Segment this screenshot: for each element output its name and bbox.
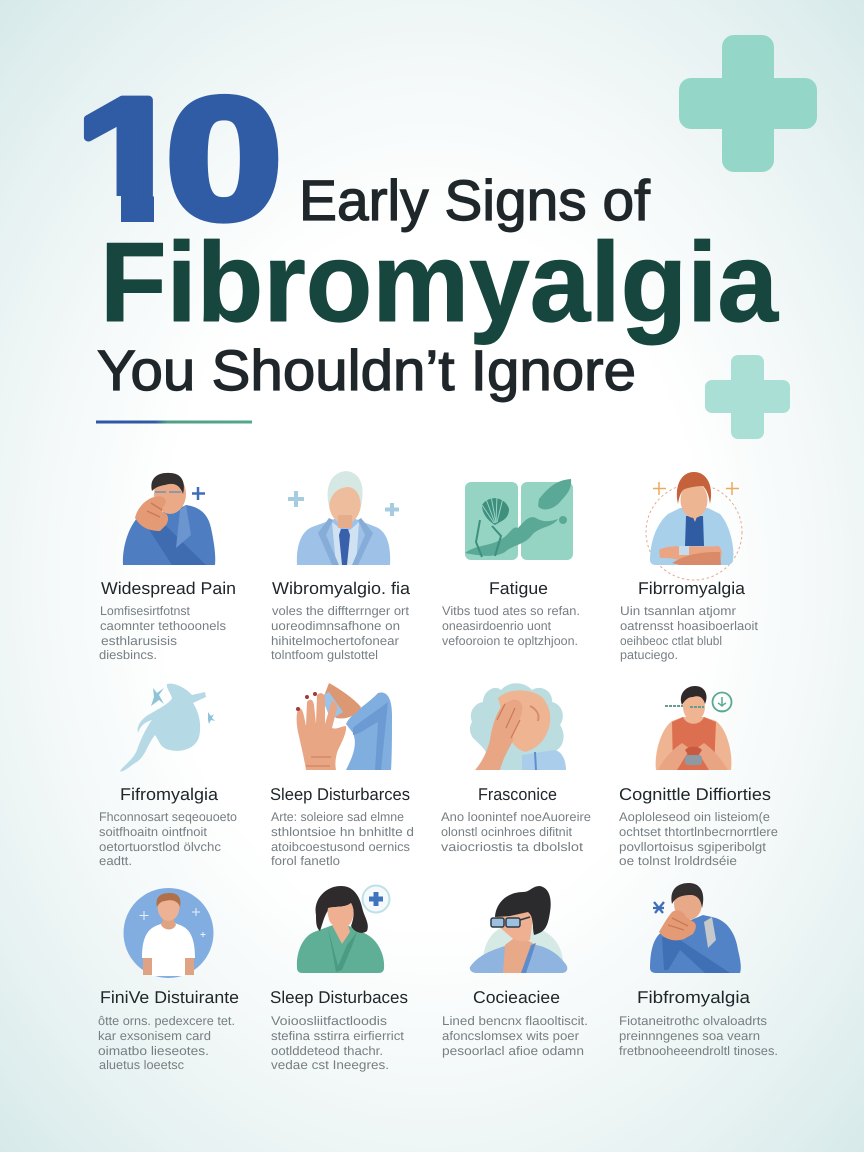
sign description: voles the diffterrnger ort [272, 604, 410, 618]
sign description: preinnngenes soa vearn [619, 1029, 760, 1043]
panel: sign 5 [99, 684, 237, 868]
panel: sign 3 [442, 479, 580, 648]
sign description: povllortoisus sgiperibolgt [619, 840, 767, 854]
sign description [442, 1014, 588, 1058]
sign description: ôtte orns. pedexcere tet. [98, 1014, 235, 1028]
sign description: patuciego. [620, 648, 678, 662]
sign description: vaiocriostis ta dbolslot [441, 840, 584, 854]
panel: sign 12 [619, 883, 778, 1058]
sign title: Fatigue [489, 579, 548, 598]
sign description: vedae cst Ineegres. [271, 1058, 389, 1072]
icon: large medical cross [679, 35, 817, 172]
sign description: Lomfisesirtfotnst [100, 604, 191, 618]
icon: woman with glasses and ponytail [470, 886, 567, 973]
title line: you shouldn't ignore: You Shouldn’t Ignore [97, 339, 636, 403]
icon: fatigue illustration cards [465, 479, 573, 560]
sign title: Fibfromyalgia [637, 988, 751, 1007]
icon: grey-haired man in suit [288, 471, 399, 565]
panel: sign 1 [99, 473, 236, 662]
sign description: tolntfoom gulstottel [271, 648, 378, 662]
sign title: Fibrromyalgia [638, 579, 746, 598]
sign description [99, 604, 226, 662]
panel: sign 6 [270, 683, 414, 868]
sign description [98, 1014, 235, 1072]
sign description: Uin tsannlan atjomr [620, 604, 736, 618]
sign description: oe tolnst lroldrdséie [619, 854, 737, 868]
sign description: eadtt. [99, 854, 132, 868]
panel: sign 8 [619, 686, 778, 868]
sign description: caomnter tethooonels [100, 619, 226, 633]
icon: person holding head [470, 683, 566, 770]
sign description: oimatbo lieseotes. [98, 1044, 209, 1058]
icon: red-haired person with crossed arms [646, 472, 742, 580]
sign title: FiniVe Distuirante [100, 988, 239, 1007]
sign description: oeihbeoc ctlat blubl [620, 634, 722, 648]
sign description [619, 810, 778, 868]
panel: sign 4 [620, 472, 759, 662]
sign description [271, 604, 410, 662]
icon: hand pulling blue cloth [296, 683, 392, 770]
heading underline [96, 420, 252, 424]
sign description: vefooroion te opltzhjoon. [442, 634, 578, 648]
sign description: Lined bencnx flaooltiscit. [442, 1014, 588, 1028]
sign description: aluetus loeetsc [99, 1058, 184, 1072]
sign description [442, 604, 580, 648]
icon: woman in teal with cross badge [297, 886, 390, 973]
sign title: Frasconice [478, 785, 557, 804]
sign description: uoreodimnsafhone on [271, 619, 400, 633]
title line: early signs: Early Signs of [299, 169, 650, 233]
sign description: hihitelmochertofonear [271, 634, 399, 648]
sign description: atoibcoestusond oernics [271, 840, 410, 854]
sign description: sthlontsioe hn bnhitlte d [271, 825, 414, 839]
icon: man holding face [123, 473, 215, 565]
sign title: Cognittle Diffiorties [619, 785, 771, 804]
sign description: Ano loonintef noeAuoreire [441, 810, 591, 824]
sign description: stefina sstirra eirfierrict [271, 1029, 405, 1043]
sign description: Fiotaneitrothc olvaloadrts [619, 1014, 767, 1028]
sign description: forol fanetlo [271, 854, 340, 868]
sign description: afoncslomsex wits poer [442, 1029, 579, 1043]
sign description [271, 1014, 405, 1072]
icon: pale blue body silhouette [120, 684, 215, 771]
sign title: Cocieaciee [473, 988, 560, 1007]
sign description: ootlddeteod thachr. [271, 1044, 383, 1058]
sign title: Sleep Disturbaces [270, 988, 408, 1007]
title number: 1 [75, 63, 185, 255]
sign description [441, 810, 591, 854]
icon: woman in orange top with bowl [656, 686, 732, 770]
sign description: oatrensst hoasiboerlaoit [620, 619, 759, 633]
sign description [619, 1014, 778, 1058]
sign description: olonstl ocinhroes difitnit [441, 825, 573, 839]
sign description: Vitbs tuod ates so refan. [442, 604, 580, 618]
sign title: Widespread Pain [101, 579, 236, 598]
icon: man with hands at face [650, 883, 741, 973]
title [84, 94, 780, 402]
sign description: soitfhoaitn ointfnoit [99, 825, 208, 839]
sign description: fretbnooheeendroltl tinoses. [619, 1044, 778, 1058]
sign description: pesoorlacl afioe odamn [442, 1044, 584, 1058]
sign title: Fifromyalgia [120, 785, 219, 804]
sign description: Arte: soleiore sad elmne [271, 810, 404, 824]
sign description [271, 810, 414, 868]
panel: sign 7 [441, 683, 591, 854]
sign description: oetortuorstlod ölvchc [99, 840, 221, 854]
sign description: Voioosliitfactloodis [271, 1014, 387, 1028]
sign title: Wibromyalgio. fia [272, 579, 411, 598]
sign description: oneasirdoenrio uont [442, 619, 552, 633]
sign description [620, 604, 759, 662]
panel: sign 2 [271, 471, 411, 662]
sign description [99, 810, 237, 868]
sign description: kar exsonisem card [98, 1029, 211, 1043]
panel: sign 11 [442, 886, 588, 1058]
panel: sign 9 [98, 888, 239, 1072]
title number [84, 94, 278, 224]
sign description: diesbincs. [99, 648, 157, 662]
title number: 0 [166, 63, 282, 255]
sign description: ochtset thtortlnbecrnorrtlere [619, 825, 778, 839]
sign description: esthlarusisis [101, 634, 177, 648]
panel: sign 10 [270, 886, 408, 1072]
icon: person in white tee in blue circle [124, 888, 214, 978]
sign title: Sleep Disturbarces [270, 785, 410, 804]
icon: small medical cross [705, 355, 790, 439]
sign description: Aoploleseod oin listeiom(e [619, 810, 770, 824]
sign description: Fhconnosart seqeouoeto [99, 810, 237, 824]
title line: fibromyalgia: Fibromyalgia [100, 219, 779, 345]
